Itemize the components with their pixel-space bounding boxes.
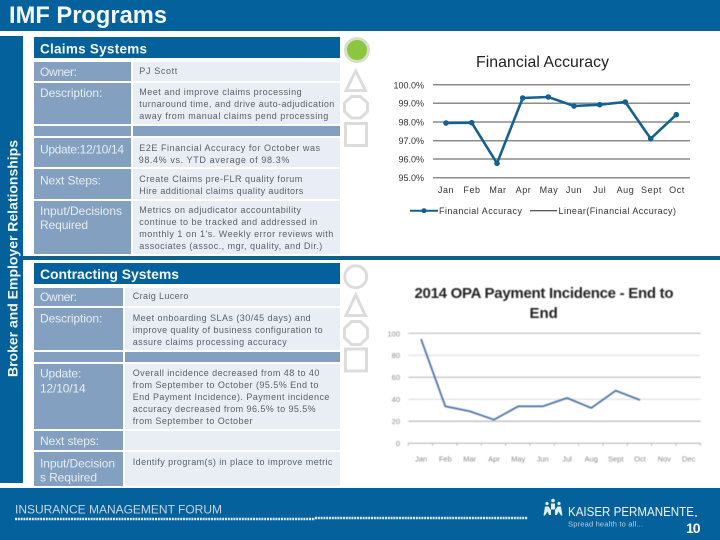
- y axis labels: 95.0%: [398, 173, 424, 183]
- month labels: Mar: [489, 185, 507, 195]
- row: description: Meet and improve claims processing: [139, 87, 302, 97]
- logo tagline: Spread health to all...: [568, 520, 643, 528]
- y axis labels: 98.0%: [398, 118, 424, 128]
- row: owner: [34, 288, 340, 306]
- grid lines: [433, 85, 690, 178]
- month labels: Aug: [585, 454, 598, 464]
- horizontal divider band: [23, 256, 720, 260]
- month labels: [415, 454, 696, 464]
- footer bar: [0, 488, 720, 540]
- month labels: Jul: [593, 185, 606, 195]
- y axis labels: 60: [392, 373, 400, 382]
- row: input and decisions: monthly 1 on 1's. Weekly error reviews with: [139, 229, 333, 239]
- row: next steps: Next steps:: [40, 434, 99, 448]
- row: next steps: Hire additional claims quality auditors: [139, 186, 304, 196]
- chart title: Financial Accuracy: [476, 54, 609, 71]
- row: input and decisions: s Required: [40, 470, 97, 484]
- row: update: from September to October: [133, 416, 252, 426]
- chart: Financial Accuracy: [393, 54, 690, 216]
- row: input and decisions: Metrics on adjudicator accountability: [139, 205, 302, 215]
- y axis labels: 99.0%: [398, 98, 424, 108]
- row: owner: [34, 62, 340, 81]
- dotted rule: [15, 518, 528, 519]
- month labels: May: [511, 454, 526, 464]
- header bar with title: IMF Programs: [9, 3, 167, 29]
- month labels: Mar: [463, 454, 477, 464]
- legend: Financial Accuracy: [439, 206, 522, 216]
- row: description: assure claims processing accuracy: [133, 337, 287, 347]
- month labels: Jun: [537, 454, 549, 464]
- row: input and decisions: [34, 201, 340, 254]
- month labels: Nov: [658, 454, 671, 464]
- row: next steps: [34, 431, 340, 450]
- status icons: claims: [344, 38, 368, 146]
- row: update: Update:: [40, 367, 81, 381]
- month labels: Oct: [669, 185, 685, 195]
- footer title: INSURANCE MANAGEMENT FORUM: [15, 502, 222, 516]
- month labels: Sept: [608, 454, 624, 464]
- row: description: improve quality of business configuration to: [133, 325, 323, 335]
- row: input and decisions: Required: [40, 218, 88, 232]
- month labels: Sept: [641, 185, 662, 195]
- row: input and decisions: associates (assoc., mgr, quality, and Dir.): [139, 241, 322, 251]
- row: description: Description:: [40, 86, 102, 100]
- row: input and decisions: continue to be tracked and addressed in: [139, 217, 317, 227]
- logo wordmark: KAISER PERMANENTE: [568, 504, 694, 519]
- header bar with title: [0, 0, 720, 31]
- row: input and decisions: Identify program(s) in place to improve metric: [133, 457, 333, 467]
- icon: Kaiser Permanente logo figures: [544, 499, 562, 516]
- row: next steps: Create Claims pre-FLR quality forum: [139, 174, 302, 184]
- row: description: turnaround time, and drive auto-adjudication: [139, 99, 334, 109]
- month labels: Apr: [488, 454, 500, 464]
- y axis labels: [387, 330, 400, 448]
- row: update: End Payment Incidence). Payment incidence: [133, 392, 329, 402]
- month labels: Aug: [617, 185, 634, 195]
- heading: Contracting Systems: [34, 263, 340, 284]
- chart title: End: [530, 305, 558, 322]
- month labels: Jul: [562, 454, 572, 464]
- row: owner: PJ Scott: [139, 66, 178, 76]
- y axis labels: 100.0%: [393, 80, 424, 90]
- y axis labels: 97.0%: [398, 136, 424, 146]
- side bar: Broker and Employer Relationships: [0, 36, 23, 483]
- month labels: Oct: [634, 454, 647, 464]
- row: update: [34, 364, 340, 429]
- month labels: [438, 185, 685, 195]
- page number: 10: [686, 520, 701, 536]
- month labels: Dec: [682, 454, 696, 464]
- month labels: Jan: [438, 185, 454, 195]
- y axis labels: 0: [396, 439, 400, 448]
- month labels: Feb: [463, 185, 481, 195]
- row: description: Meet onboarding SLAs (30/45 days) and: [133, 313, 311, 323]
- y axis labels: 40: [392, 395, 400, 404]
- panel: Contracting Systems: [34, 263, 340, 486]
- row: update: from September to October (95.5% End to: [133, 380, 318, 390]
- row: owner: Owner:: [40, 290, 77, 304]
- month labels: Feb: [439, 454, 452, 464]
- row: update: 12/10/14: [40, 381, 86, 395]
- heading: Claims Systems: Claims Systems: [40, 42, 147, 56]
- row: update: accuracy decreased from 96.5% to 95.5%: [133, 404, 316, 414]
- row: input and decisions: [34, 452, 340, 486]
- month labels: Apr: [516, 185, 531, 195]
- y axis labels: [393, 80, 424, 183]
- chart title: 2014 OPA Payment Incidence - End to: [414, 285, 674, 302]
- row: update: Update:12/10/14: [40, 142, 124, 156]
- month labels: Jun: [566, 185, 582, 195]
- data line: [446, 97, 676, 163]
- row: description: [34, 83, 340, 124]
- legend: Linear(Financial Accuracy): [558, 206, 676, 216]
- row: next steps: Next Steps:: [40, 173, 101, 187]
- status icons: contracting: [344, 266, 368, 371]
- month labels: May: [540, 185, 558, 195]
- blank separator row: [34, 126, 340, 136]
- x axis ticks: [408, 443, 700, 446]
- row: description: Description:: [40, 312, 102, 326]
- row: description: [34, 308, 340, 350]
- heading: Contracting Systems: Contracting Systems: [40, 266, 179, 282]
- row: next steps: [34, 169, 340, 199]
- row: update: 98.4% vs. YTD average of 98.3%: [139, 155, 289, 165]
- data line: [421, 339, 640, 420]
- month labels: Jan: [415, 454, 427, 464]
- heading: Claims Systems: [34, 37, 340, 58]
- y axis labels: 96.0%: [398, 154, 424, 164]
- row: update: Overall incidence decreased from 48 to 40: [133, 368, 319, 378]
- row: owner: Craig Lucero: [133, 291, 188, 301]
- data markers: [443, 94, 679, 166]
- row: update: E2E Financial Accuracy for October was: [139, 143, 320, 153]
- row: input and decisions: Input/Decisions: [40, 204, 122, 218]
- chart: 2014 OPA Payment Incidence: [387, 285, 701, 464]
- legend: [410, 206, 676, 216]
- row: update: [34, 138, 340, 167]
- row: description: away from manual claims pend processing: [139, 111, 328, 121]
- panel: Claims Systems: [34, 37, 340, 254]
- blank separator row: [34, 352, 340, 362]
- y axis labels: 20: [392, 417, 400, 426]
- grid lines: [408, 333, 701, 443]
- side bar: Broker and Employer Relationships: Broker and Employer Relationships: [4, 140, 20, 377]
- row: owner: Owner:: [40, 65, 77, 79]
- y axis labels: 80: [392, 351, 400, 360]
- y axis labels: 100: [387, 330, 400, 338]
- chart title: [414, 285, 674, 322]
- row: input and decisions: Input/Decision: [40, 456, 115, 470]
